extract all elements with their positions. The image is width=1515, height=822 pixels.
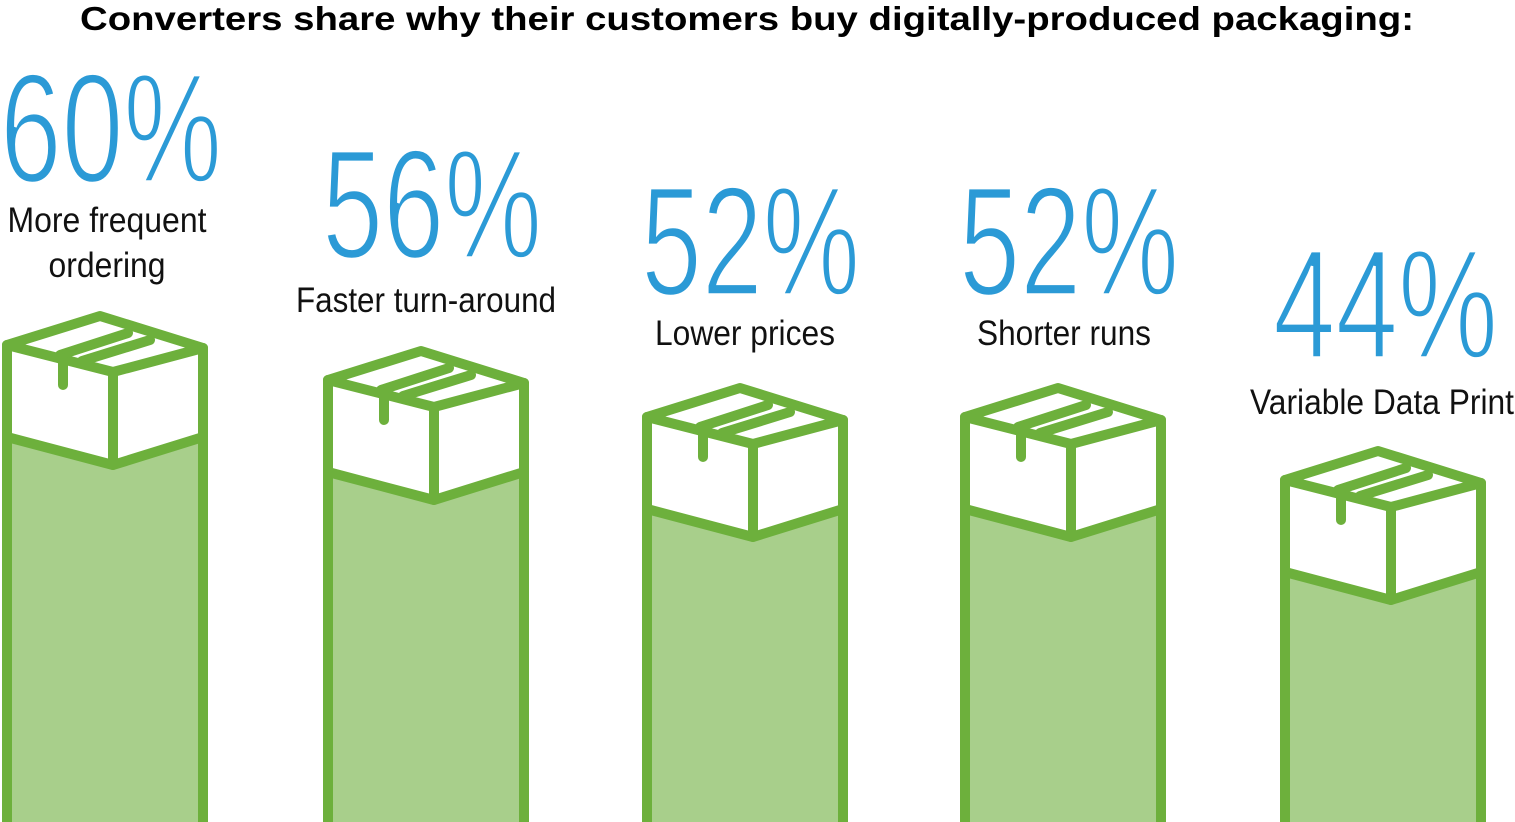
icon: box bar <box>965 388 1161 822</box>
title: Converters share why their customers buy digitally-produced packaging: <box>80 0 1414 37</box>
column 4: Shorter runs <box>959 155 1179 822</box>
label: Shorter runs: Shorter runs <box>977 314 1151 353</box>
icon: box bar <box>328 351 524 822</box>
label: More frequent ordering: ordering <box>48 246 166 285</box>
label: Faster turn-around: Faster turn-around <box>296 281 556 320</box>
column 2: Faster turn-around <box>296 118 556 822</box>
column 1: More frequent ordering <box>0 42 222 822</box>
percentage 56: 56% <box>322 118 542 292</box>
icon: box bar <box>7 316 203 822</box>
percentage 52: 52% <box>959 155 1179 329</box>
percentage 52: 52% <box>641 155 860 329</box>
column 3: Lower prices <box>641 155 860 822</box>
percentage 60: 60% <box>0 42 222 216</box>
label: Lower prices: Lower prices <box>655 314 835 353</box>
label: More frequent ordering: More frequent <box>8 201 207 240</box>
column 5: Variable Data Print <box>1250 218 1514 822</box>
icon: box bar <box>647 388 843 822</box>
icon: box bar <box>1285 451 1481 822</box>
